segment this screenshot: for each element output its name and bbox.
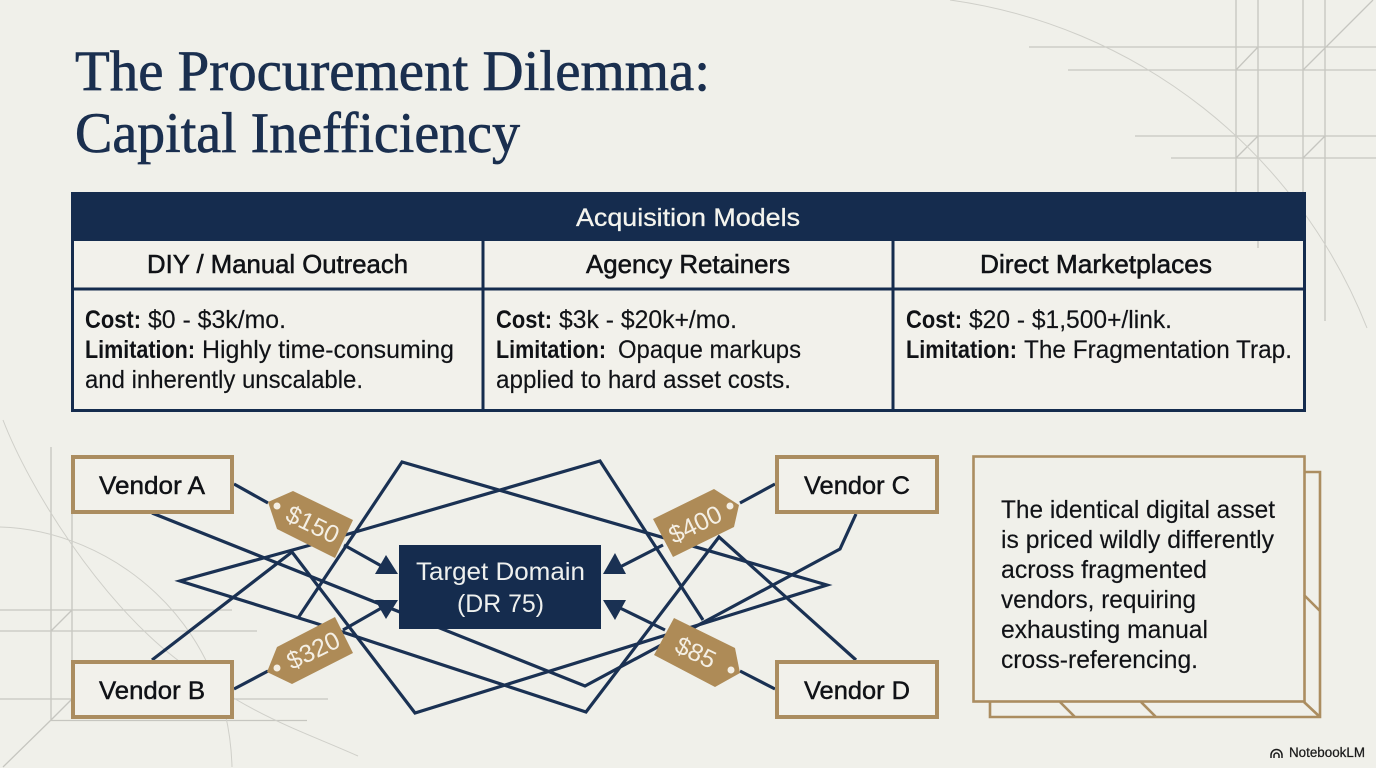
NotebookLM watermark: NotebookLM — [1289, 745, 1365, 760]
column: Agency Retainers: Agency Retainers — [586, 249, 790, 279]
column: DIY / Manual Outreach: $0 - $3k/mo. — [148, 306, 286, 334]
vendor A: Vendor A — [99, 472, 205, 500]
vendor D: Vendor D — [804, 677, 910, 705]
price tag: $320: $320 — [282, 626, 345, 676]
column: Agency Retainers: Cost: — [496, 306, 552, 334]
column: Agency Retainers: $3k - $20k+/mo. — [559, 306, 737, 334]
column: DIY / Manual Outreach: Limitation: — [85, 336, 195, 364]
column: Agency Retainers — [496, 249, 801, 394]
column: Direct Marketplaces: The Fragmentation Trap. — [1024, 336, 1292, 364]
column: DIY / Manual Outreach: and inherently unscalable. — [85, 366, 363, 394]
price tag: $150: $150 — [281, 500, 344, 550]
callout: fragmented pricing note: across fragmented — [1001, 556, 1207, 584]
vendor B: Vendor B — [99, 677, 205, 705]
price tag: $85: $85 — [671, 631, 720, 675]
price tag: $400: $400 — [664, 500, 727, 550]
vendor C — [777, 457, 937, 512]
table heading: Acquisition Models — [576, 204, 800, 232]
icon: arrows into target — [375, 553, 626, 620]
title: Capital Inefficiency — [75, 102, 520, 165]
price tag: $85 — [654, 618, 740, 687]
tangled connector lines — [152, 461, 856, 713]
column: Direct Marketplaces — [906, 249, 1292, 364]
table header bar — [71, 192, 1306, 241]
column: Agency Retainers: applied to hard asset costs. — [496, 366, 791, 394]
column: DIY / Manual Outreach: Highly time-consuming — [202, 336, 454, 364]
panel: acquisition models table — [71, 192, 1306, 412]
vendor A — [73, 457, 232, 512]
callout: fragmented pricing note: exhausting manual — [1001, 616, 1208, 644]
column: Direct Marketplaces: Cost: — [906, 306, 962, 334]
price tag: $150 — [268, 491, 353, 558]
title: The Procurement Dilemma: — [75, 40, 710, 103]
column: DIY / Manual Outreach: Cost: — [85, 306, 141, 334]
target domain box: (DR 75) — [457, 590, 544, 618]
target domain box — [399, 545, 601, 629]
callout: fragmented pricing note: The identical digital asset — [1001, 496, 1275, 524]
column: Direct Marketplaces: Limitation: — [906, 336, 1017, 364]
callout: fragmented pricing note: vendors, requiring — [1001, 586, 1196, 614]
vendor C: Vendor C — [804, 472, 910, 500]
vendor D — [777, 662, 937, 717]
diagram: tangled vendor connections — [73, 457, 937, 717]
column: Direct Marketplaces: Direct Marketplaces — [980, 249, 1212, 279]
callout: fragmented pricing note — [974, 456, 1320, 717]
target domain box: Target Domain — [416, 558, 585, 586]
callout: fragmented pricing note: is priced wildly differently — [1001, 526, 1274, 554]
callout: fragmented pricing note: cross-referencing. — [1001, 646, 1198, 674]
price tag: $320 — [267, 617, 353, 684]
column: Agency Retainers: Limitation: — [496, 336, 606, 364]
price tag: $400 — [653, 489, 739, 557]
column: Agency Retainers: Opaque markups — [618, 336, 801, 364]
column: DIY / Manual Outreach: DIY / Manual Outreach — [147, 249, 408, 279]
column: DIY / Manual Outreach — [85, 249, 454, 394]
vendor B — [73, 662, 232, 717]
title — [75, 40, 710, 165]
column: Direct Marketplaces: $20 - $1,500+/link. — [969, 306, 1172, 334]
